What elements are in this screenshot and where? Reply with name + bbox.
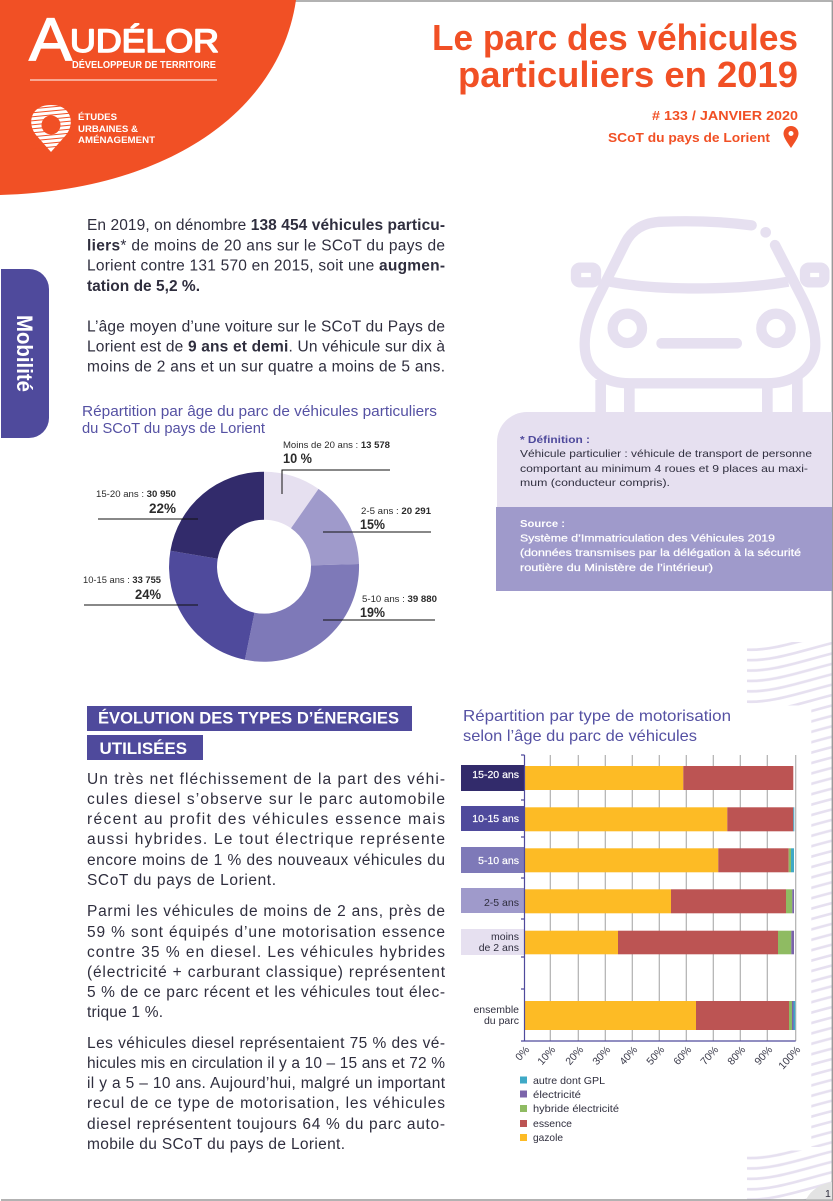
panel: source: Source : xyxy=(520,518,565,530)
intro text: Lorient est de 9 ans et demi. Un véhicule sur dix à xyxy=(87,338,445,356)
text block: paragraph 2: 59 % sont équipés d’une motorisation essence xyxy=(87,924,445,941)
text block: paragraph 3: il y a 5 – 10 ans. Aujourd’hui, malgré un important xyxy=(87,1075,446,1092)
legend: électricité xyxy=(533,1089,581,1101)
text: études urbaines xyxy=(78,112,155,146)
slice: 5-10 ans xyxy=(245,564,359,662)
bar: 2-5 ans: 2-5 ans xyxy=(484,897,519,909)
text block: paragraph 3 xyxy=(87,1035,446,1153)
intro text xyxy=(87,217,445,376)
bar: 5-10 ans: 5-10 ans xyxy=(478,855,519,867)
label: 5-10 ans: 19% xyxy=(360,605,385,620)
text block: paragraph 2: Parmi les véhicules de moins de 2 ans, près de xyxy=(87,903,445,920)
slice: 10-15 ans xyxy=(169,551,254,660)
text: études urbaines: AMÉNAGEMENT xyxy=(78,135,155,146)
intro text: L’âge moyen d’une voiture sur le SCoT du Pays de xyxy=(87,318,445,336)
panel: definition xyxy=(497,412,832,507)
axis labels: 40% xyxy=(617,1044,640,1068)
tab: Mobilité: Mobilité xyxy=(12,315,37,392)
axis labels: 80% xyxy=(725,1044,748,1068)
legend: essence xyxy=(533,1118,572,1130)
bar: moins de 2 ans: moins xyxy=(491,931,519,943)
text block: paragraph 3: Les véhicules diesel représentaient 75 % des vé- xyxy=(87,1035,445,1052)
label: moins de 2 ans xyxy=(283,440,390,466)
intro text: tation de 5,2 %. xyxy=(87,278,200,295)
panel: source: routière du Ministère de l’intérieur) xyxy=(520,562,713,574)
label: 15-20 ans xyxy=(96,489,176,516)
header logo panel xyxy=(0,0,296,195)
heading: donut chart: du SCoT du pays de Lorient xyxy=(82,421,265,437)
heading: donut chart: Répartition par âge du parc de véhicules particuliers xyxy=(82,404,437,420)
issue and territory: SCoT du pays de Lorient xyxy=(608,130,771,145)
axis labels: 100% xyxy=(776,1044,803,1072)
label: moins de 2 ans: Moins de 20 ans : 13 578 xyxy=(283,440,390,450)
panel: definition: comportant au minimum 4 roues et 9 places au maxi- xyxy=(520,463,809,475)
text block: paragraph 1: encore moins de 1 % des nouveaux véhicules du xyxy=(87,852,445,869)
panel: source: (données transmises par la délégation à la sécurité xyxy=(520,547,801,559)
text block: paragraph 1: récent au profit des véhicules essence mais xyxy=(87,811,445,828)
axis labels: 70% xyxy=(698,1044,721,1068)
label: 15-20 ans: 22% xyxy=(149,501,176,516)
slice: moins de 2 ans xyxy=(264,472,318,528)
label: 10-15 ans xyxy=(83,575,161,602)
panel: source xyxy=(496,507,832,591)
text block: paragraph 3: mobile du SCoT du pays de Lorient. xyxy=(87,1136,345,1153)
text block: paragraph 2: 5 % de ce parc récent et les véhicules tout élec- xyxy=(87,984,445,1001)
icon: map pin xyxy=(784,126,798,148)
label: 2-5 ans: 2-5 ans : 20 291 xyxy=(361,506,431,516)
text block: paragraph 2 xyxy=(87,903,446,1021)
issue and territory: # 133 / JANVIER 2020 xyxy=(652,108,798,123)
intro text: liers* de moins de 20 ans sur le SCoT du pays de xyxy=(87,238,445,254)
bar: ensemble du parc xyxy=(473,1001,795,1030)
title: particuliers en 2019 xyxy=(458,54,798,95)
panel: definition: Véhicule particulier : véhicule de transport de personne xyxy=(520,448,812,460)
axis labels xyxy=(513,1044,803,1072)
text block: paragraph 1: SCoT du pays de Lorient. xyxy=(87,872,276,889)
text block: paragraph 2: trique 1 %. xyxy=(87,1004,163,1021)
bar: moins de 2 ans: de 2 ans xyxy=(479,942,519,954)
legend: gazole xyxy=(533,1132,563,1144)
panel: definition: mum (conducteur compris). xyxy=(520,477,670,489)
donut chart xyxy=(83,440,437,662)
heading: donut chart xyxy=(82,404,437,437)
axis labels: 0% xyxy=(513,1044,532,1063)
slice: 2-5 ans xyxy=(291,489,359,565)
text block: paragraph 1: Un très net fléchissement de la part des véhi- xyxy=(87,771,445,788)
bar: 15-20 ans xyxy=(461,765,793,791)
text: études urbaines: URBAINES & xyxy=(78,124,138,135)
page number xyxy=(806,1182,832,1200)
bar: ensemble du parc: du parc xyxy=(484,1015,519,1027)
title: Le parc des véhicules xyxy=(432,17,798,58)
label: 15-20 ans: 15-20 ans : 30 950 xyxy=(96,489,176,499)
text block: paragraph 2: contre 35 % en diesel. Les véhicules hybrides xyxy=(87,944,445,961)
legend: autre dont GPL xyxy=(533,1075,605,1087)
axis labels: 30% xyxy=(590,1044,613,1068)
intro text: En 2019, on dénombre 138 454 véhicules particu- xyxy=(87,217,445,234)
stacked bar chart xyxy=(461,755,803,1072)
icon: car xyxy=(576,221,824,417)
bar: moins de 2 ans xyxy=(461,929,794,955)
text block: paragraph 3: hicules mis en circulation il y a 10 – 15 ans et 72 % xyxy=(87,1055,445,1072)
axis labels: 10% xyxy=(535,1044,558,1068)
heading: stacked bar chart: Répartition par type de motorisation xyxy=(463,708,731,725)
label: 2-5 ans: 15% xyxy=(360,517,385,532)
axis labels: 50% xyxy=(644,1044,667,1068)
label: 10-15 ans: 24% xyxy=(135,587,161,602)
label: 10-15 ans: 10-15 ans : 33 755 xyxy=(83,575,161,585)
logo: Audélor: A xyxy=(29,6,72,73)
page number: 1 xyxy=(825,1188,831,1200)
axis labels: 90% xyxy=(752,1044,775,1068)
text block: paragraph 3: recul de ce type de motorisation, les véhicules xyxy=(87,1095,445,1112)
text: études urbaines: ÉTUDES xyxy=(78,112,117,123)
issue and territory xyxy=(608,108,798,148)
bar: 5-10 ans xyxy=(461,847,794,873)
heading: stacked bar chart: selon l’âge du parc de véhicules xyxy=(463,728,697,745)
axis labels: 60% xyxy=(671,1044,694,1068)
icon: striped location pin xyxy=(30,105,72,152)
label: 5-10 ans: 5-10 ans : 39 880 xyxy=(362,594,437,604)
text block: paragraph 1: aussi hybrides. Le tout électrique représente xyxy=(87,831,445,848)
bar: 2-5 ans xyxy=(461,888,794,913)
legend xyxy=(520,1075,619,1144)
bar: ensemble du parc: ensemble xyxy=(473,1004,519,1016)
bar: 15-20 ans: 15-20 ans xyxy=(472,769,519,781)
panel: source: Système d’Immatriculation des Véhicules 2019 xyxy=(520,532,775,544)
panel: definition: * Définition : xyxy=(520,434,590,446)
intro text: moins de 2 ans et un sur quatre a moins de 5 ans. xyxy=(87,358,445,376)
bar: 10-15 ans: 10-15 ans xyxy=(472,813,519,825)
text block: paragraph 2: (électricité + carburant classique) représentent xyxy=(87,964,446,981)
axis labels: 20% xyxy=(563,1044,586,1068)
bar: 10-15 ans xyxy=(461,806,794,831)
tab: Mobilité xyxy=(1,269,49,438)
text block: paragraph 1: cules diesel s’observe sur le parc automobile xyxy=(87,791,445,808)
slice: 15-20 ans xyxy=(170,472,264,559)
section heading: évolution des énergies: UTILISÉES xyxy=(100,739,187,758)
label: 2-5 ans xyxy=(360,506,431,532)
legend: hybride électricité xyxy=(533,1103,619,1115)
label: moins de 2 ans: 10 % xyxy=(283,451,312,466)
label: 5-10 ans xyxy=(360,594,437,620)
heading: stacked bar chart xyxy=(463,708,731,745)
logo: Audélor xyxy=(29,6,219,73)
text block: paragraph 1 xyxy=(87,771,445,889)
logo: Audélor: DÉVELOPPEUR DE TERRITOIRE xyxy=(72,58,216,71)
intro text: Lorient contre 131 570 en 2015, soit une augmen- xyxy=(87,258,445,274)
section heading: évolution des énergies xyxy=(87,706,412,760)
title xyxy=(432,17,798,95)
section heading: évolution des énergies: ÉVOLUTION DES TYPES D’ÉNERGIES xyxy=(98,708,399,728)
text block: paragraph 3: diesel représentent toujours 64 % du parc auto- xyxy=(87,1116,445,1133)
logo: Audélor: UDÉLOR xyxy=(70,23,219,59)
